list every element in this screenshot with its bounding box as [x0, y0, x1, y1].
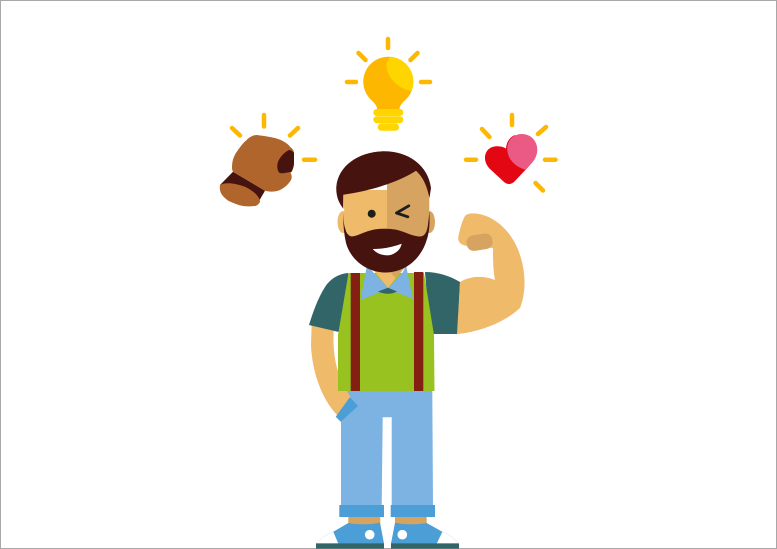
glove cuff: [220, 183, 260, 206]
left sleeve: [309, 273, 350, 332]
bulb glass: [363, 57, 413, 110]
right sleeve: [425, 272, 460, 334]
thumb: [465, 233, 494, 252]
neck: [370, 266, 406, 288]
vest: [338, 273, 434, 391]
figure: man: [309, 151, 525, 549]
trousers: [341, 391, 433, 505]
mouth: [373, 244, 402, 255]
left arm: [311, 322, 352, 416]
flexed right arm: [457, 213, 525, 334]
winking eye: [396, 206, 409, 217]
icon: light bulb with rays: [347, 39, 430, 131]
ears: [338, 211, 435, 233]
icon: heart with rays: [466, 115, 556, 190]
collar: [360, 265, 413, 300]
rays: heart: [466, 115, 556, 190]
icon: boxing glove with rays: [220, 115, 315, 206]
heart red: [485, 135, 530, 184]
eye: [368, 210, 376, 218]
sleeve cuff: [336, 397, 358, 422]
face: [343, 168, 429, 238]
beard: [343, 211, 430, 272]
trouser cuffs: [339, 505, 435, 517]
ankles: [348, 516, 427, 527]
glove wrist: [220, 172, 265, 203]
glove body: [232, 135, 294, 192]
rays: bulb: [347, 39, 430, 82]
hair: [336, 151, 431, 209]
bulb highlight: [387, 57, 413, 91]
bulb base: [373, 109, 403, 131]
rays: glove: [232, 115, 315, 160]
right shoe: [391, 523, 459, 549]
glove opening: [277, 150, 294, 173]
collar knot: [378, 288, 397, 294]
heart pink: [507, 134, 537, 170]
suspenders: [351, 272, 423, 391]
left shoe: [316, 523, 384, 549]
